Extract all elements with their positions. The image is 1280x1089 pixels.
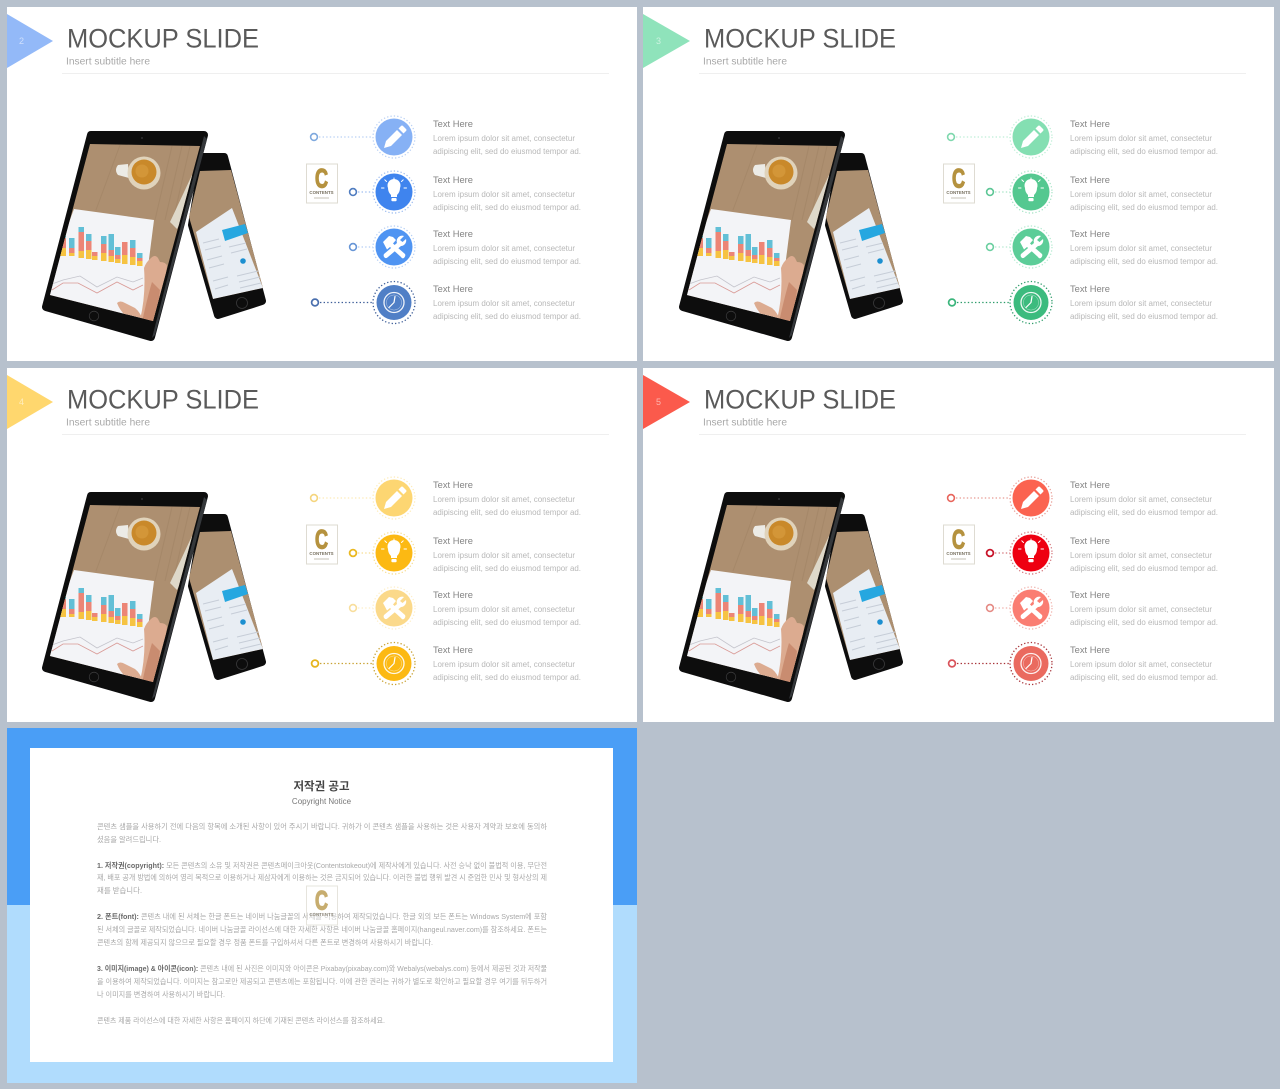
logo badge: C xyxy=(315,524,328,554)
step 4 text: Text Here xyxy=(433,645,473,655)
step 2 text: adipiscing elit, sed do eiusmod tempor ad. xyxy=(433,203,581,212)
heading: MOCKUP SLIDE xyxy=(704,24,896,54)
notice subtitle: Copyright Notice xyxy=(292,797,352,806)
step 1 text: adipiscing elit, sed do eiusmod tempor ad. xyxy=(433,508,581,517)
logo badge: C xyxy=(315,886,328,916)
step 3 text xyxy=(1070,229,1218,266)
step 4 connector xyxy=(312,660,373,667)
step 4 connector xyxy=(949,299,1010,306)
logo badge xyxy=(944,164,974,203)
white notice card xyxy=(30,748,613,1062)
step 1 text: adipiscing elit, sed do eiusmod tempor ad. xyxy=(433,147,581,156)
number triangle: 4 xyxy=(19,397,24,407)
icon: clock xyxy=(373,282,415,324)
step 4 text: Lorem ipsum dolor sit amet, consectetur xyxy=(433,660,575,669)
step 2 connector xyxy=(350,550,373,556)
slide background xyxy=(643,7,1274,361)
number triangle xyxy=(7,14,53,68)
step 2 text: Lorem ipsum dolor sit amet, consectetur xyxy=(433,190,575,199)
panel: copyright notice slide xyxy=(7,728,637,1083)
step 3 text xyxy=(1070,590,1218,627)
step 3 connector xyxy=(987,605,1010,611)
step 1 text xyxy=(1070,480,1218,517)
step 4 text: adipiscing elit, sed do eiusmod tempor ad. xyxy=(1070,312,1218,321)
step 3 connector xyxy=(350,244,373,250)
step 1 text: Lorem ipsum dolor sit amet, consectetur xyxy=(1070,495,1212,504)
icon: pencil xyxy=(373,477,415,519)
logo badge: C xyxy=(952,524,965,554)
logo badge xyxy=(306,164,338,203)
image: tablet and phone mockup xyxy=(677,135,907,338)
step 1 connector xyxy=(948,495,1010,501)
icon: clock xyxy=(1010,642,1052,684)
logo badge: CONTENTS xyxy=(309,912,334,917)
panel: slide 2 blue xyxy=(7,7,637,361)
step 1 connector xyxy=(311,134,373,140)
step 4 connector xyxy=(312,299,373,306)
step 4 text: Lorem ipsum dolor sit amet, consectetur xyxy=(1070,660,1212,669)
blue upper band xyxy=(7,728,637,905)
step 1 text: Text Here xyxy=(433,119,473,129)
light blue lower band xyxy=(7,905,637,1083)
step 4 text xyxy=(433,645,581,682)
number triangle: 3 xyxy=(656,36,661,46)
paragraph 3: image and icon xyxy=(97,964,547,999)
paragraph 3: image and icon: 을 이용하여 제작되었습니다. 이미지는 참고로만 제공되고 콘텐츠에는 포함됩니다. 이에 관한 권리는 귀하가 별도로 확인하고 필요할 경우 여기를 뒤두하거 xyxy=(97,977,547,986)
step 3 text: Text Here xyxy=(1070,229,1110,239)
icon: light bulb xyxy=(373,171,415,213)
panel: slide 4 yellow xyxy=(7,368,637,722)
step 1 text: Text Here xyxy=(433,480,473,490)
step 3 text: Text Here xyxy=(1070,590,1110,600)
step 2 text: adipiscing elit, sed do eiusmod tempor ad. xyxy=(1070,203,1218,212)
step 2 text: Text Here xyxy=(1070,175,1110,185)
step 1 text: Lorem ipsum dolor sit amet, consectetur xyxy=(433,134,575,143)
step 2 text: Lorem ipsum dolor sit amet, consectetur xyxy=(433,551,575,560)
logo badge: C xyxy=(952,164,965,194)
step 1 connector xyxy=(948,134,1010,140)
step 4 text: Lorem ipsum dolor sit amet, consectetur xyxy=(1070,299,1212,308)
step 3 text: adipiscing elit, sed do eiusmod tempor ad. xyxy=(1070,618,1218,627)
logo badge: CONTENTS xyxy=(946,190,971,195)
step 3 text xyxy=(433,229,581,266)
step 1 text: adipiscing elit, sed do eiusmod tempor ad. xyxy=(1070,508,1218,517)
heading: MOCKUP SLIDE xyxy=(67,24,259,54)
step 3 connector xyxy=(987,244,1010,250)
heading: MOCKUP SLIDE xyxy=(67,384,259,414)
step 3 text xyxy=(433,590,581,627)
icon: pencil xyxy=(373,116,415,158)
logo badge: C xyxy=(315,164,328,194)
step 1 text xyxy=(433,119,581,156)
icon: light bulb xyxy=(1010,532,1052,574)
step 2 text: Text Here xyxy=(433,175,473,185)
step 3 text: Text Here xyxy=(433,229,473,239)
number triangle xyxy=(643,14,690,68)
step 4 text xyxy=(1070,284,1218,321)
paragraph 1: copyright xyxy=(97,861,547,895)
step 1 text xyxy=(1070,119,1218,156)
paragraph 1: copyright: 재를 받습니다. xyxy=(97,886,142,895)
step 3 text: adipiscing elit, sed do eiusmod tempor ad. xyxy=(433,618,581,627)
step 3 text: adipiscing elit, sed do eiusmod tempor ad. xyxy=(1070,257,1218,266)
step 2 text xyxy=(433,536,581,573)
panel: slide 5 red xyxy=(643,368,1274,722)
image: tablet and phone mockup xyxy=(40,496,270,699)
step 3 text: Lorem ipsum dolor sit amet, consectetur xyxy=(1070,244,1212,253)
slide background xyxy=(643,368,1274,722)
step 2 text: adipiscing elit, sed do eiusmod tempor ad. xyxy=(433,564,581,573)
subtitle: Insert subtitle here xyxy=(703,418,787,428)
step 2 text: Text Here xyxy=(1070,536,1110,546)
paragraph 3: image and icon: 나 이미지를 변경하여 사용하시기 바랍니다. xyxy=(97,990,225,999)
slide background xyxy=(7,368,637,722)
step 4 text: adipiscing elit, sed do eiusmod tempor ad. xyxy=(1070,673,1218,682)
step 2 text: Lorem ipsum dolor sit amet, consectetur xyxy=(1070,551,1212,560)
step 4 text xyxy=(433,284,581,321)
step 1 text: Text Here xyxy=(1070,119,1110,129)
paragraph 2: font: 된 서체의 글꼴로 제작되었습니다. 네이버 나눔글꼴 라이선스에 대한 자세한 사항은 네이버 나눔글꼴 홈페이지(hangeul.naver.com)를 참조하세요. 폰트는 xyxy=(97,925,547,934)
step 3 text: Text Here xyxy=(433,590,473,600)
step 1 text: Lorem ipsum dolor sit amet, consectetur xyxy=(1070,134,1212,143)
icon: light bulb xyxy=(373,532,415,574)
step 3 text: Lorem ipsum dolor sit amet, consectetur xyxy=(433,244,575,253)
step 4 text: Text Here xyxy=(433,284,473,294)
step 2 text: Lorem ipsum dolor sit amet, consectetur xyxy=(1070,190,1212,199)
number triangle: 2 xyxy=(19,36,24,46)
paragraph 2: font: 2. 폰트(font): 콘텐츠 내에 된 서체는 한글 폰트는 네이버 나눔글꼴의 서체를 이용하여 제작되었습니다. 한글 외의 보든 폰트는 Windows System에 포함 xyxy=(97,912,547,921)
step 4 text xyxy=(1070,645,1218,682)
logo badge: CONTENTS xyxy=(946,551,971,556)
intro paragraph xyxy=(97,822,547,844)
icon: tools xyxy=(373,226,415,268)
paragraph 2: font xyxy=(97,912,547,947)
image: tablet and phone mockup xyxy=(677,496,907,699)
icon: tools xyxy=(373,587,415,629)
step 2 text xyxy=(1070,175,1218,212)
step 4 text: Lorem ipsum dolor sit amet, consectetur xyxy=(433,299,575,308)
notice title: 저작권 공고 xyxy=(293,779,350,793)
icon: tools xyxy=(1010,226,1052,268)
step 2 text: Text Here xyxy=(433,536,473,546)
number triangle: 5 xyxy=(656,397,661,407)
intro paragraph: 셨음을 알려드립니다. xyxy=(97,835,161,844)
intro paragraph: 콘텐츠 샘플을 사용하기 전에 다음의 항목에 소개된 사항이 있어 주시기 바랍니다. 귀하가 이 콘텐츠 샘플을 사용하는 것은 사용자 계약과 보호에 동의하 xyxy=(97,822,547,831)
icon: pencil xyxy=(1010,477,1052,519)
step 4 text: Text Here xyxy=(1070,284,1110,294)
step 2 connector xyxy=(987,189,1010,195)
heading: MOCKUP SLIDE xyxy=(704,384,896,414)
slide background xyxy=(7,7,637,361)
paragraph 2: font: 콘텐츠의 함께 제공되지 않으므로 필요할 경우 정품 폰트를 구입하셔서 다른 폰트로 변경하여 사용하시기 바랍니다. xyxy=(97,938,433,947)
logo badge xyxy=(944,524,974,564)
step 2 text xyxy=(433,175,581,212)
number triangle xyxy=(7,375,53,429)
step 1 text xyxy=(433,480,581,517)
icon: clock xyxy=(1010,282,1052,324)
step 4 connector xyxy=(949,660,1010,667)
icon: light bulb xyxy=(1010,171,1052,213)
panel: slide 3 green xyxy=(643,7,1274,361)
logo badge xyxy=(306,524,338,564)
step 2 connector xyxy=(987,550,1010,556)
subtitle: Insert subtitle here xyxy=(66,418,150,428)
subtitle: Insert subtitle here xyxy=(703,56,787,68)
logo badge: CONTENTS xyxy=(309,190,334,195)
closing line: 콘텐츠 제품 라이선스에 대한 자세한 사항은 홈페이지 하단에 기재된 콘텐츠 라이선스를 참조하세요. xyxy=(97,1016,385,1025)
step 3 connector xyxy=(350,605,373,611)
subtitle: Insert subtitle here xyxy=(66,56,150,68)
logo badge xyxy=(306,886,338,925)
logo badge: CONTENTS xyxy=(309,551,334,556)
image: tablet and phone mockup xyxy=(40,135,270,338)
step 1 text: Lorem ipsum dolor sit amet, consectetur xyxy=(433,495,575,504)
icon: clock xyxy=(373,642,415,684)
step 3 text: Lorem ipsum dolor sit amet, consectetur xyxy=(1070,605,1212,614)
paragraph 1: copyright: 1. 저작권(copyright): 모든 콘텐츠의 소유 및 저작권은 콘텐츠메이크아웃(Contentstokeout)에 제작사에게 있습니다. 사전 승낙 없이 불법적 이용, 무단전 xyxy=(97,861,547,870)
step 2 text xyxy=(1070,536,1218,573)
icon: pencil xyxy=(1010,116,1052,158)
step 1 connector xyxy=(311,495,373,501)
step 4 text: adipiscing elit, sed do eiusmod tempor ad. xyxy=(433,312,581,321)
icon: tools xyxy=(1010,587,1052,629)
step 1 text: Text Here xyxy=(1070,480,1110,490)
paragraph 1: copyright: 재, 배포 공개 방법에 의하여 영리 목적으로 이용하거나 제삼자에게 이용하는 것은 금지되어 있습니다. 이러한 불법 행위 발견 시 준엄한 민사 및 형사상의 제 xyxy=(97,873,547,882)
paragraph 3: image and icon: 3. 이미지(image) & 아이콘(icon): 콘텐츠 내에 된 사진은 이미지와 아이콘은 Pixabay(pixabay.com)와 Webalys(webalys.com) 등에서 제공된 것과 저작물 xyxy=(97,964,547,973)
step 2 connector xyxy=(350,189,373,195)
number triangle xyxy=(643,375,690,429)
step 4 text: adipiscing elit, sed do eiusmod tempor ad. xyxy=(433,673,581,682)
step 3 text: Lorem ipsum dolor sit amet, consectetur xyxy=(433,605,575,614)
step 1 text: adipiscing elit, sed do eiusmod tempor ad. xyxy=(1070,147,1218,156)
step 4 text: Text Here xyxy=(1070,645,1110,655)
step 3 text: adipiscing elit, sed do eiusmod tempor ad. xyxy=(433,257,581,266)
step 2 text: adipiscing elit, sed do eiusmod tempor ad. xyxy=(1070,564,1218,573)
